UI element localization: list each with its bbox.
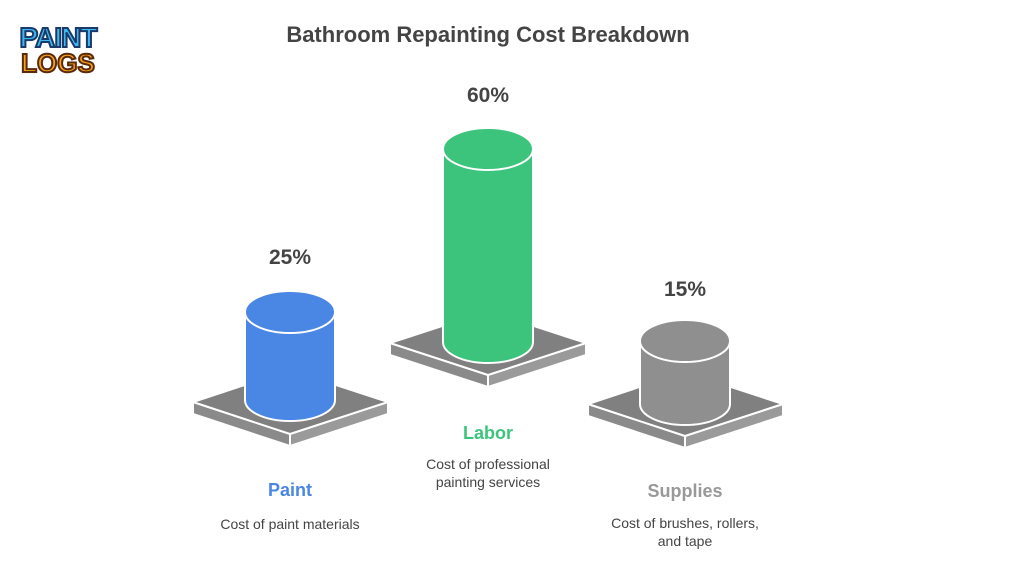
desc: labor: Cost of professional painting services [426, 456, 550, 490]
cylinder: paint [193, 291, 388, 446]
cylinder: labor [390, 128, 586, 387]
label: labor: Labor [463, 423, 513, 443]
desc: supplies: Cost of brushes, rollers, and tape [611, 515, 759, 549]
percent: labor: 60% [467, 84, 509, 107]
label: paint: Paint [268, 480, 312, 500]
cylinder: supplies [588, 320, 783, 448]
logo: LOGS [21, 48, 95, 78]
percent: supplies: 15% [664, 278, 706, 301]
desc: paint: Cost of paint materials [220, 516, 360, 532]
logo: PAINT [20, 22, 96, 53]
title: Bathroom Repainting Cost Breakdown [286, 22, 690, 47]
logo [20, 22, 98, 78]
percent: paint: 25% [269, 246, 311, 269]
label: supplies: Supplies [647, 481, 722, 501]
